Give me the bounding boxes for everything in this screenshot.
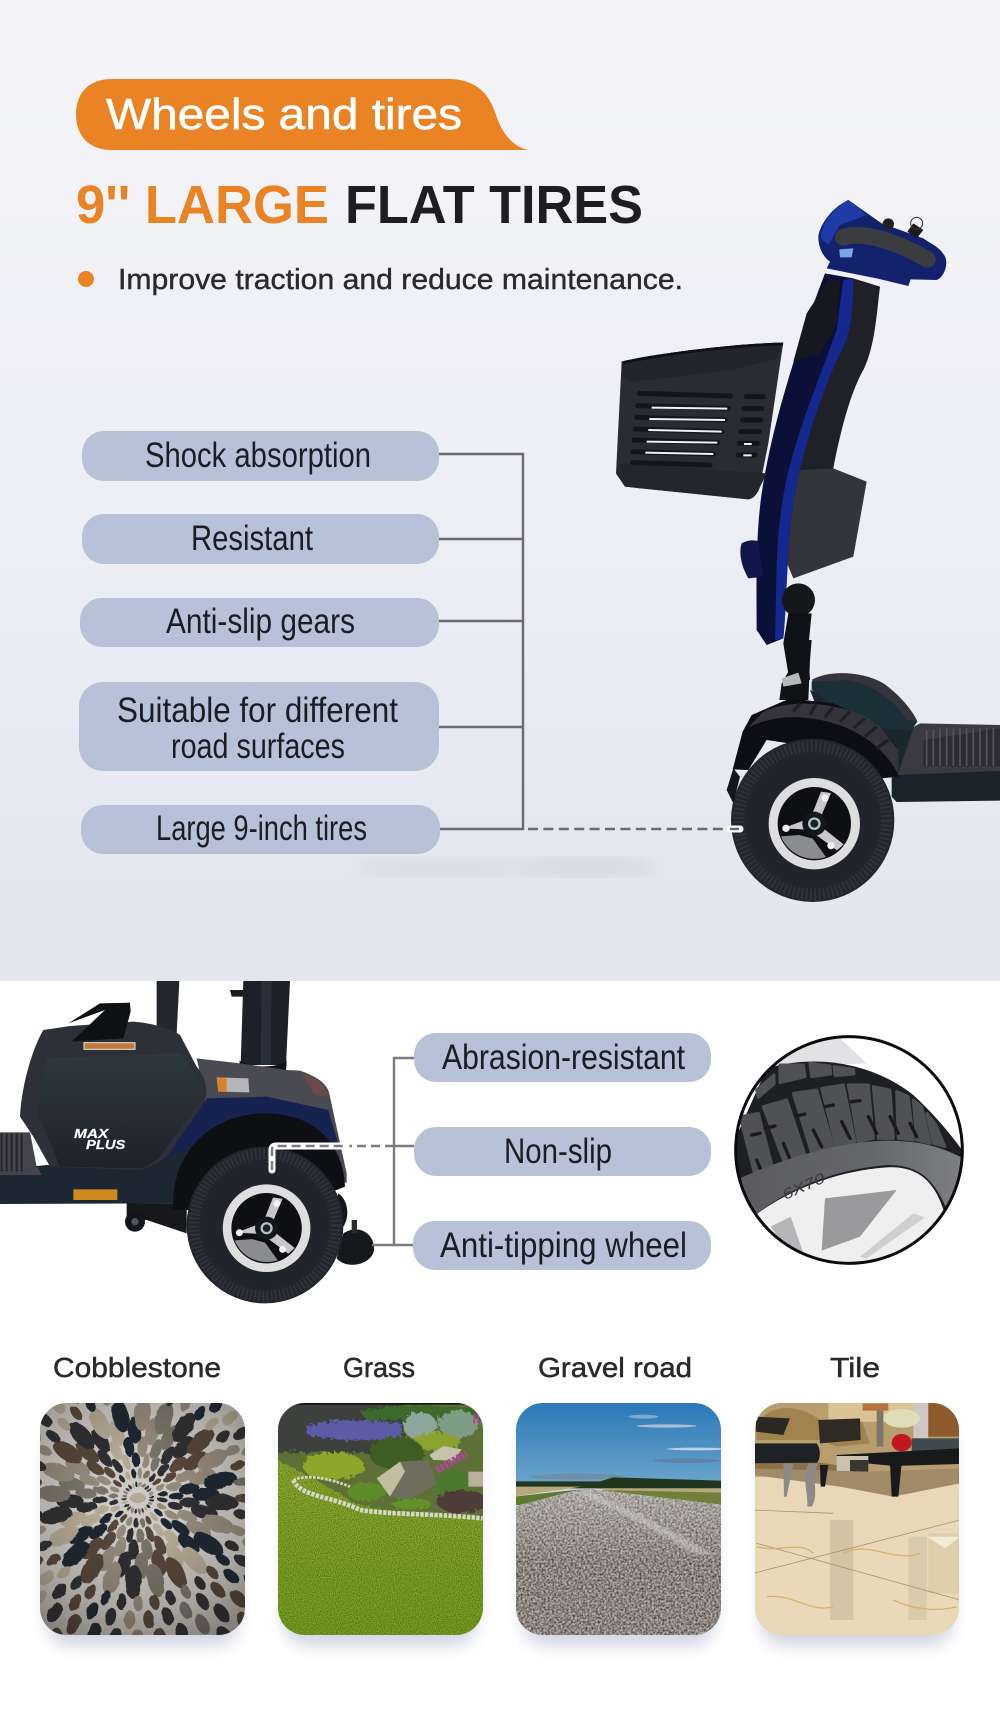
surface label: Gravel road: Gravel road <box>538 1352 692 1383</box>
logo: MAX PLUS: PLUS <box>86 1137 126 1152</box>
callout: tire tread close-up <box>733 1033 967 1277</box>
surface label: Cobblestone: Cobblestone <box>53 1352 221 1383</box>
logo: MAX PLUS: MAX <box>74 1126 110 1141</box>
label: Suitable for different road surfaces: Suitable for different <box>117 691 398 730</box>
title: 9" large flat tires <box>76 175 643 235</box>
photo shadows <box>46 1420 953 1646</box>
heading tag: Wheels and tires: Wheels and tires <box>106 90 462 139</box>
scooter rear: body and wheel <box>0 981 374 1303</box>
label: Anti-tipping wheel: Anti-tipping wheel <box>440 1226 687 1265</box>
heading tag: Wheels and tires <box>76 79 528 150</box>
label: Suitable for different road surfaces <box>79 682 439 771</box>
label: Shock absorption: Shock absorption <box>145 436 371 475</box>
label: Resistant: Resistant <box>191 519 313 558</box>
photo: grass <box>278 1403 483 1635</box>
label: Large 9-inch tires <box>81 805 440 854</box>
panel: top section background <box>0 0 1000 981</box>
label: Shock absorption <box>82 431 439 481</box>
connector lines: top feature list <box>439 454 740 829</box>
dashed pointer end on front tire <box>730 826 740 832</box>
title: 9" large flat tires: 9'' LARGE <box>76 175 329 235</box>
label: Anti-slip gears: Anti-slip gears <box>166 602 355 641</box>
label: Abrasion-resistant <box>414 1033 711 1082</box>
label: Large 9-inch tires: Large 9-inch tires <box>156 809 367 848</box>
callout: tire tread close-up: 6X70 <box>780 1170 829 1204</box>
logo: MAX PLUS <box>74 1126 126 1152</box>
shadow smudge below list <box>355 858 655 876</box>
label: Resistant <box>82 514 439 564</box>
photo: cobblestone <box>40 1403 245 1635</box>
surface label: Tile: Tile <box>830 1352 880 1383</box>
label: Non-slip: Non-slip <box>504 1132 612 1171</box>
title: 9" large flat tires: FLAT TIRES <box>345 175 643 235</box>
photo: tile floor room <box>753 1400 962 1637</box>
connector lines: lower feature list <box>272 1058 414 1245</box>
label: Abrasion-resistant: Abrasion-resistant <box>442 1038 685 1077</box>
surface label: Grass: Grass <box>343 1352 415 1383</box>
label: Anti-slip gears <box>80 598 439 647</box>
label: Non-slip <box>414 1127 711 1176</box>
label: Suitable for different road surfaces: road surfaces <box>171 727 345 766</box>
basket <box>616 343 783 499</box>
photo: gravel road <box>513 1400 727 1637</box>
scooter front: wheel, fenders, footplate <box>727 640 1000 902</box>
scooter upper: tiller, basket <box>616 200 946 680</box>
handlebar head <box>818 200 946 286</box>
bullet: improve traction: Improve traction and reduce maintenance. <box>118 264 683 296</box>
panel: lower white section <box>0 981 1000 1735</box>
